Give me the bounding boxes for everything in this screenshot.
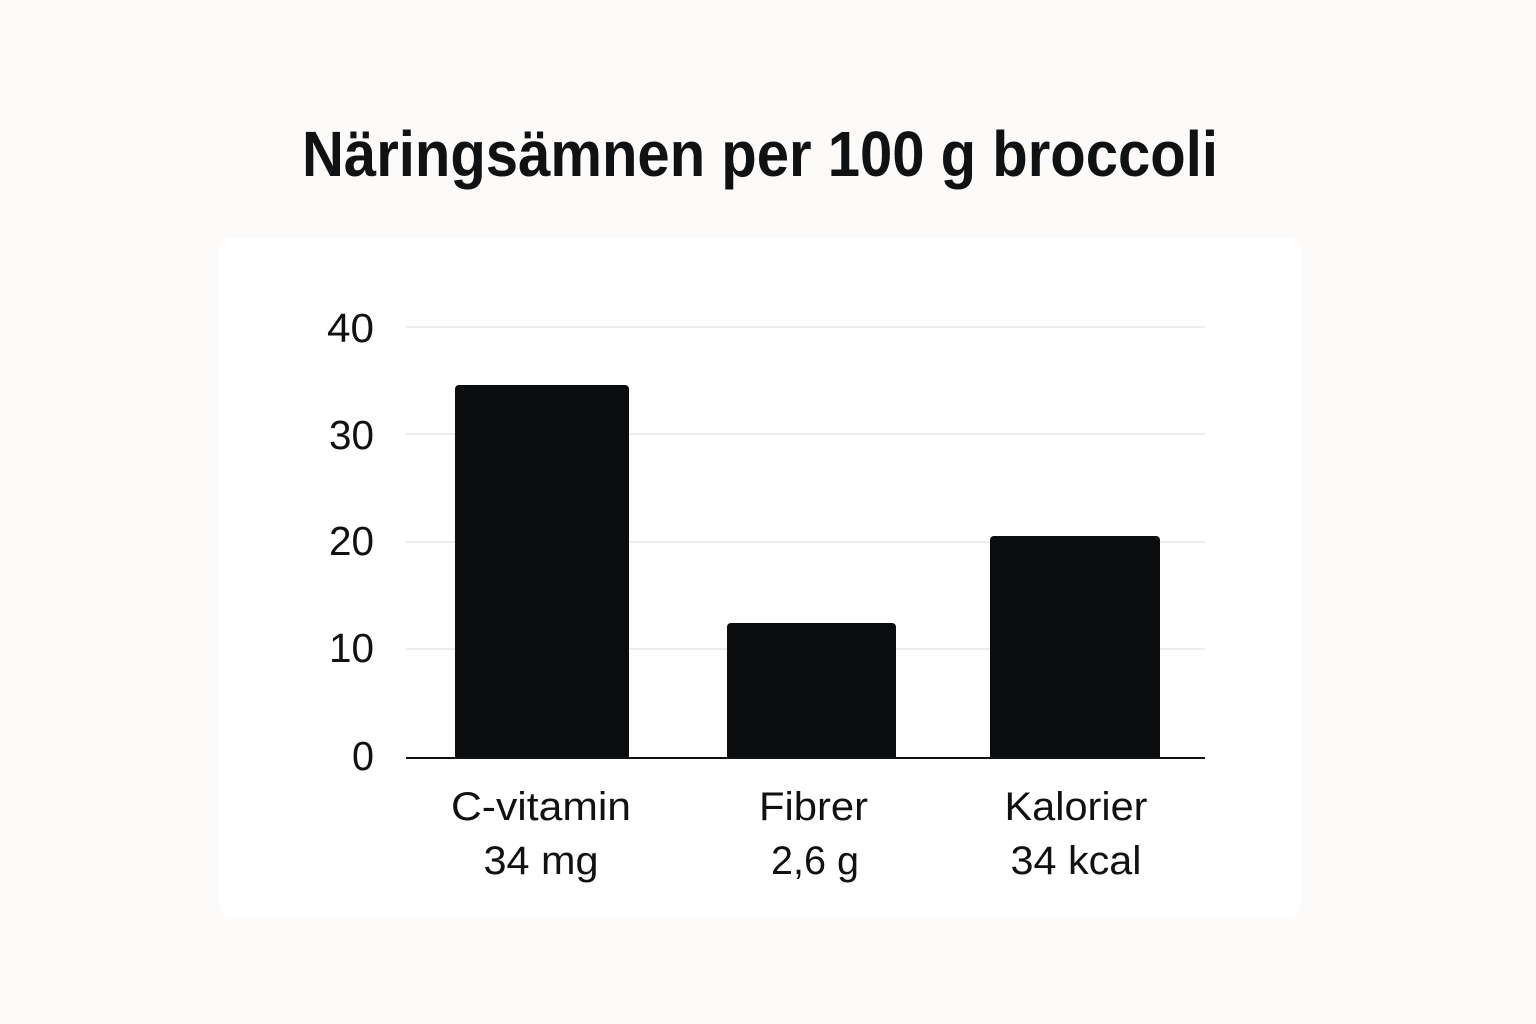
label: C-vitamin: 34 mg: [484, 839, 598, 883]
y axis labels: [327, 305, 374, 779]
y axis labels: 40: [327, 305, 374, 351]
bar: Kalorier: [990, 536, 1160, 758]
label: Kalorier: 34 kcal: [1010, 839, 1142, 883]
label: Kalorier: Kalorier: [1004, 785, 1148, 829]
label: Fibrer: 2,6 g: [771, 839, 859, 883]
label: Fibrer: [759, 785, 868, 883]
y axis labels: 10: [329, 625, 374, 671]
y axis labels: 20: [329, 518, 374, 564]
label: C-vitamin: [451, 785, 631, 883]
x axis line: [406, 757, 1205, 759]
label: Fibrer: Fibrer: [759, 785, 868, 829]
y axis labels: 0: [352, 733, 374, 779]
panel: chart card: [219, 237, 1301, 918]
bar: C-vitamin: [455, 385, 629, 758]
title: Näringsämnen per 100 g broccoli: [302, 118, 1218, 190]
bar: Fibrer: [727, 623, 896, 758]
label: Kalorier: [1004, 785, 1148, 883]
y axis labels: 30: [329, 412, 374, 458]
label: C-vitamin: C-vitamin: [451, 785, 631, 829]
